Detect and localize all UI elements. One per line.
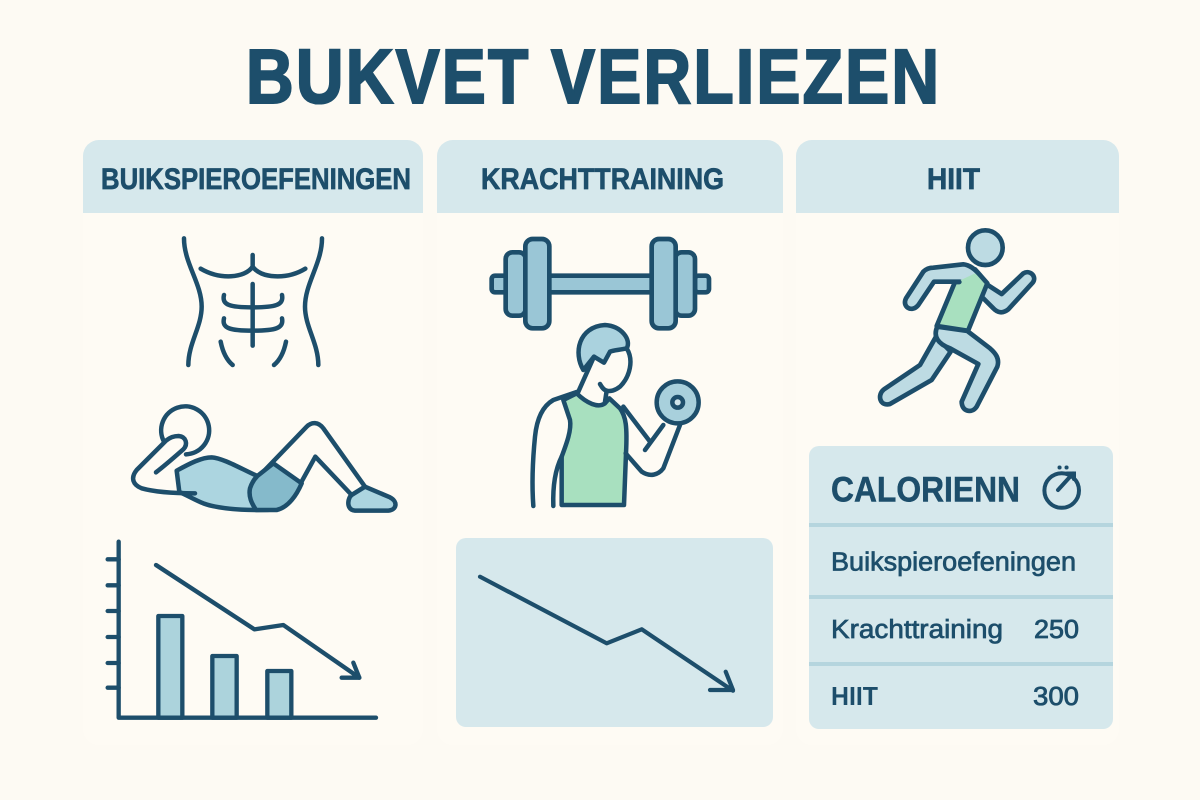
icon: barbell	[492, 239, 709, 328]
panel: hiit	[796, 140, 1119, 745]
title: BUKVET VERLIEZEN	[246, 34, 939, 120]
table row: krachttraining: 250	[1034, 614, 1079, 644]
table: calories per exercise	[809, 446, 1113, 729]
panel heading: hiit: HIIT	[927, 163, 980, 196]
table row: buikspieroefeningen: Buikspieroefeningen	[831, 548, 1076, 576]
table row: hiit	[831, 681, 1079, 711]
table row: krachttraining: Krachttraining	[831, 616, 1003, 644]
panel heading: hiit	[796, 140, 1119, 213]
panel heading: krachttraining: KRACHTTRAINING	[481, 163, 724, 196]
panel heading: buikspieroefeningen	[83, 140, 423, 213]
icon: man lifting dumbbell	[533, 325, 699, 506]
icon: stopwatch	[1044, 468, 1079, 508]
panel: buikspieroefeningen	[83, 140, 423, 745]
panel heading: krachttraining	[437, 140, 783, 213]
icon: runner	[880, 230, 1034, 411]
table row: hiit: 300	[1033, 681, 1079, 711]
icon: person doing sit-up	[133, 406, 395, 511]
chart: falling trend line	[456, 538, 773, 727]
panel heading: buikspieroefeningen: BUIKSPIEROEFENINGEN	[101, 163, 411, 196]
table row: krachttraining	[831, 614, 1079, 644]
panel: krachttraining	[437, 140, 783, 745]
table row: hiit: HIIT	[831, 681, 878, 711]
bar chart with falling trend arrow	[108, 542, 376, 718]
icon: abdominal muscles	[184, 238, 322, 365]
table heading: calories: CALORIENN	[831, 470, 1020, 510]
